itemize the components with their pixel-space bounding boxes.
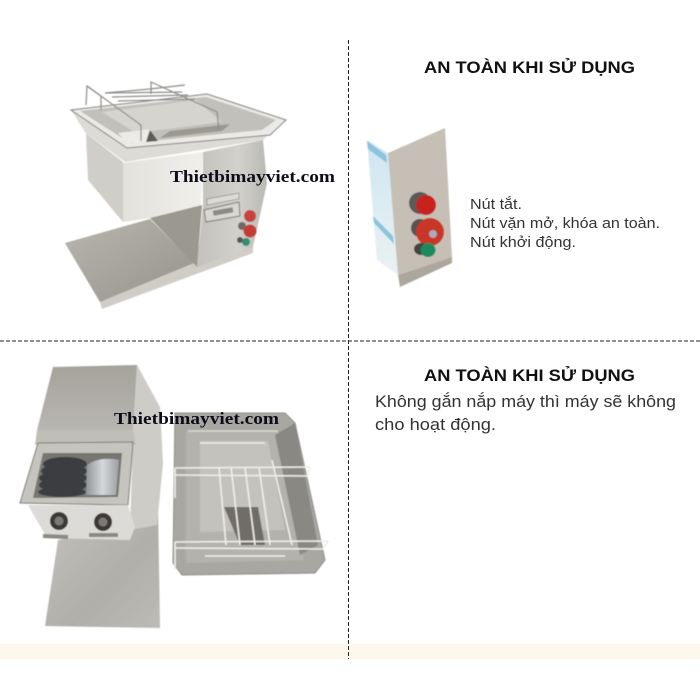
safety twist button xyxy=(411,218,444,246)
watermark bottom: Thietbimayviet.com xyxy=(114,409,279,428)
lid warning text xyxy=(375,392,676,434)
left knob xyxy=(43,512,68,537)
panel steel face xyxy=(388,128,452,275)
watermark top: Thietbimayviet.com xyxy=(170,167,335,186)
button description text: Nút tắt. xyxy=(470,196,522,213)
button description text xyxy=(470,196,660,251)
button description text: Nút vặn mở, khóa an toàn. xyxy=(470,215,660,232)
photo: control button panel xyxy=(367,128,452,287)
photo: assembled slicer machine xyxy=(65,82,286,309)
start button xyxy=(414,243,436,257)
lid warning text: Không gắn nắp máy thì máy sẽ không xyxy=(375,392,676,411)
machine tray xyxy=(71,94,286,162)
panel side with blue strips xyxy=(367,140,398,275)
vertical divider xyxy=(348,40,350,659)
photo: removed tray with wire rack xyxy=(173,413,328,575)
heading top: AN TOÀN KHI SỬ DỤNG xyxy=(424,58,635,77)
machine body xyxy=(86,133,267,267)
dark blade roller xyxy=(38,457,87,497)
opened machine housing xyxy=(35,365,163,530)
machine control plate and buttons xyxy=(204,193,256,246)
stop button xyxy=(409,192,436,215)
blade box frame xyxy=(20,442,133,505)
horizontal divider xyxy=(0,340,700,342)
right knob xyxy=(89,513,118,535)
tray body xyxy=(173,413,325,575)
lid warning text: cho hoạt động. xyxy=(375,415,496,434)
machine base plate xyxy=(65,219,253,309)
wire rack xyxy=(175,443,328,570)
heading bottom: AN TOÀN KHI SỬ DỤNG xyxy=(424,366,635,385)
panel bottom edge xyxy=(398,257,452,287)
silver blade roller xyxy=(86,459,119,495)
machine wire rack xyxy=(86,82,219,141)
blade box lower housing xyxy=(28,505,135,540)
opened machine base plate xyxy=(45,505,160,628)
photo: opened machine with blades xyxy=(20,365,163,628)
button description text: Nút khởi động. xyxy=(470,234,576,251)
footer band xyxy=(0,644,700,659)
